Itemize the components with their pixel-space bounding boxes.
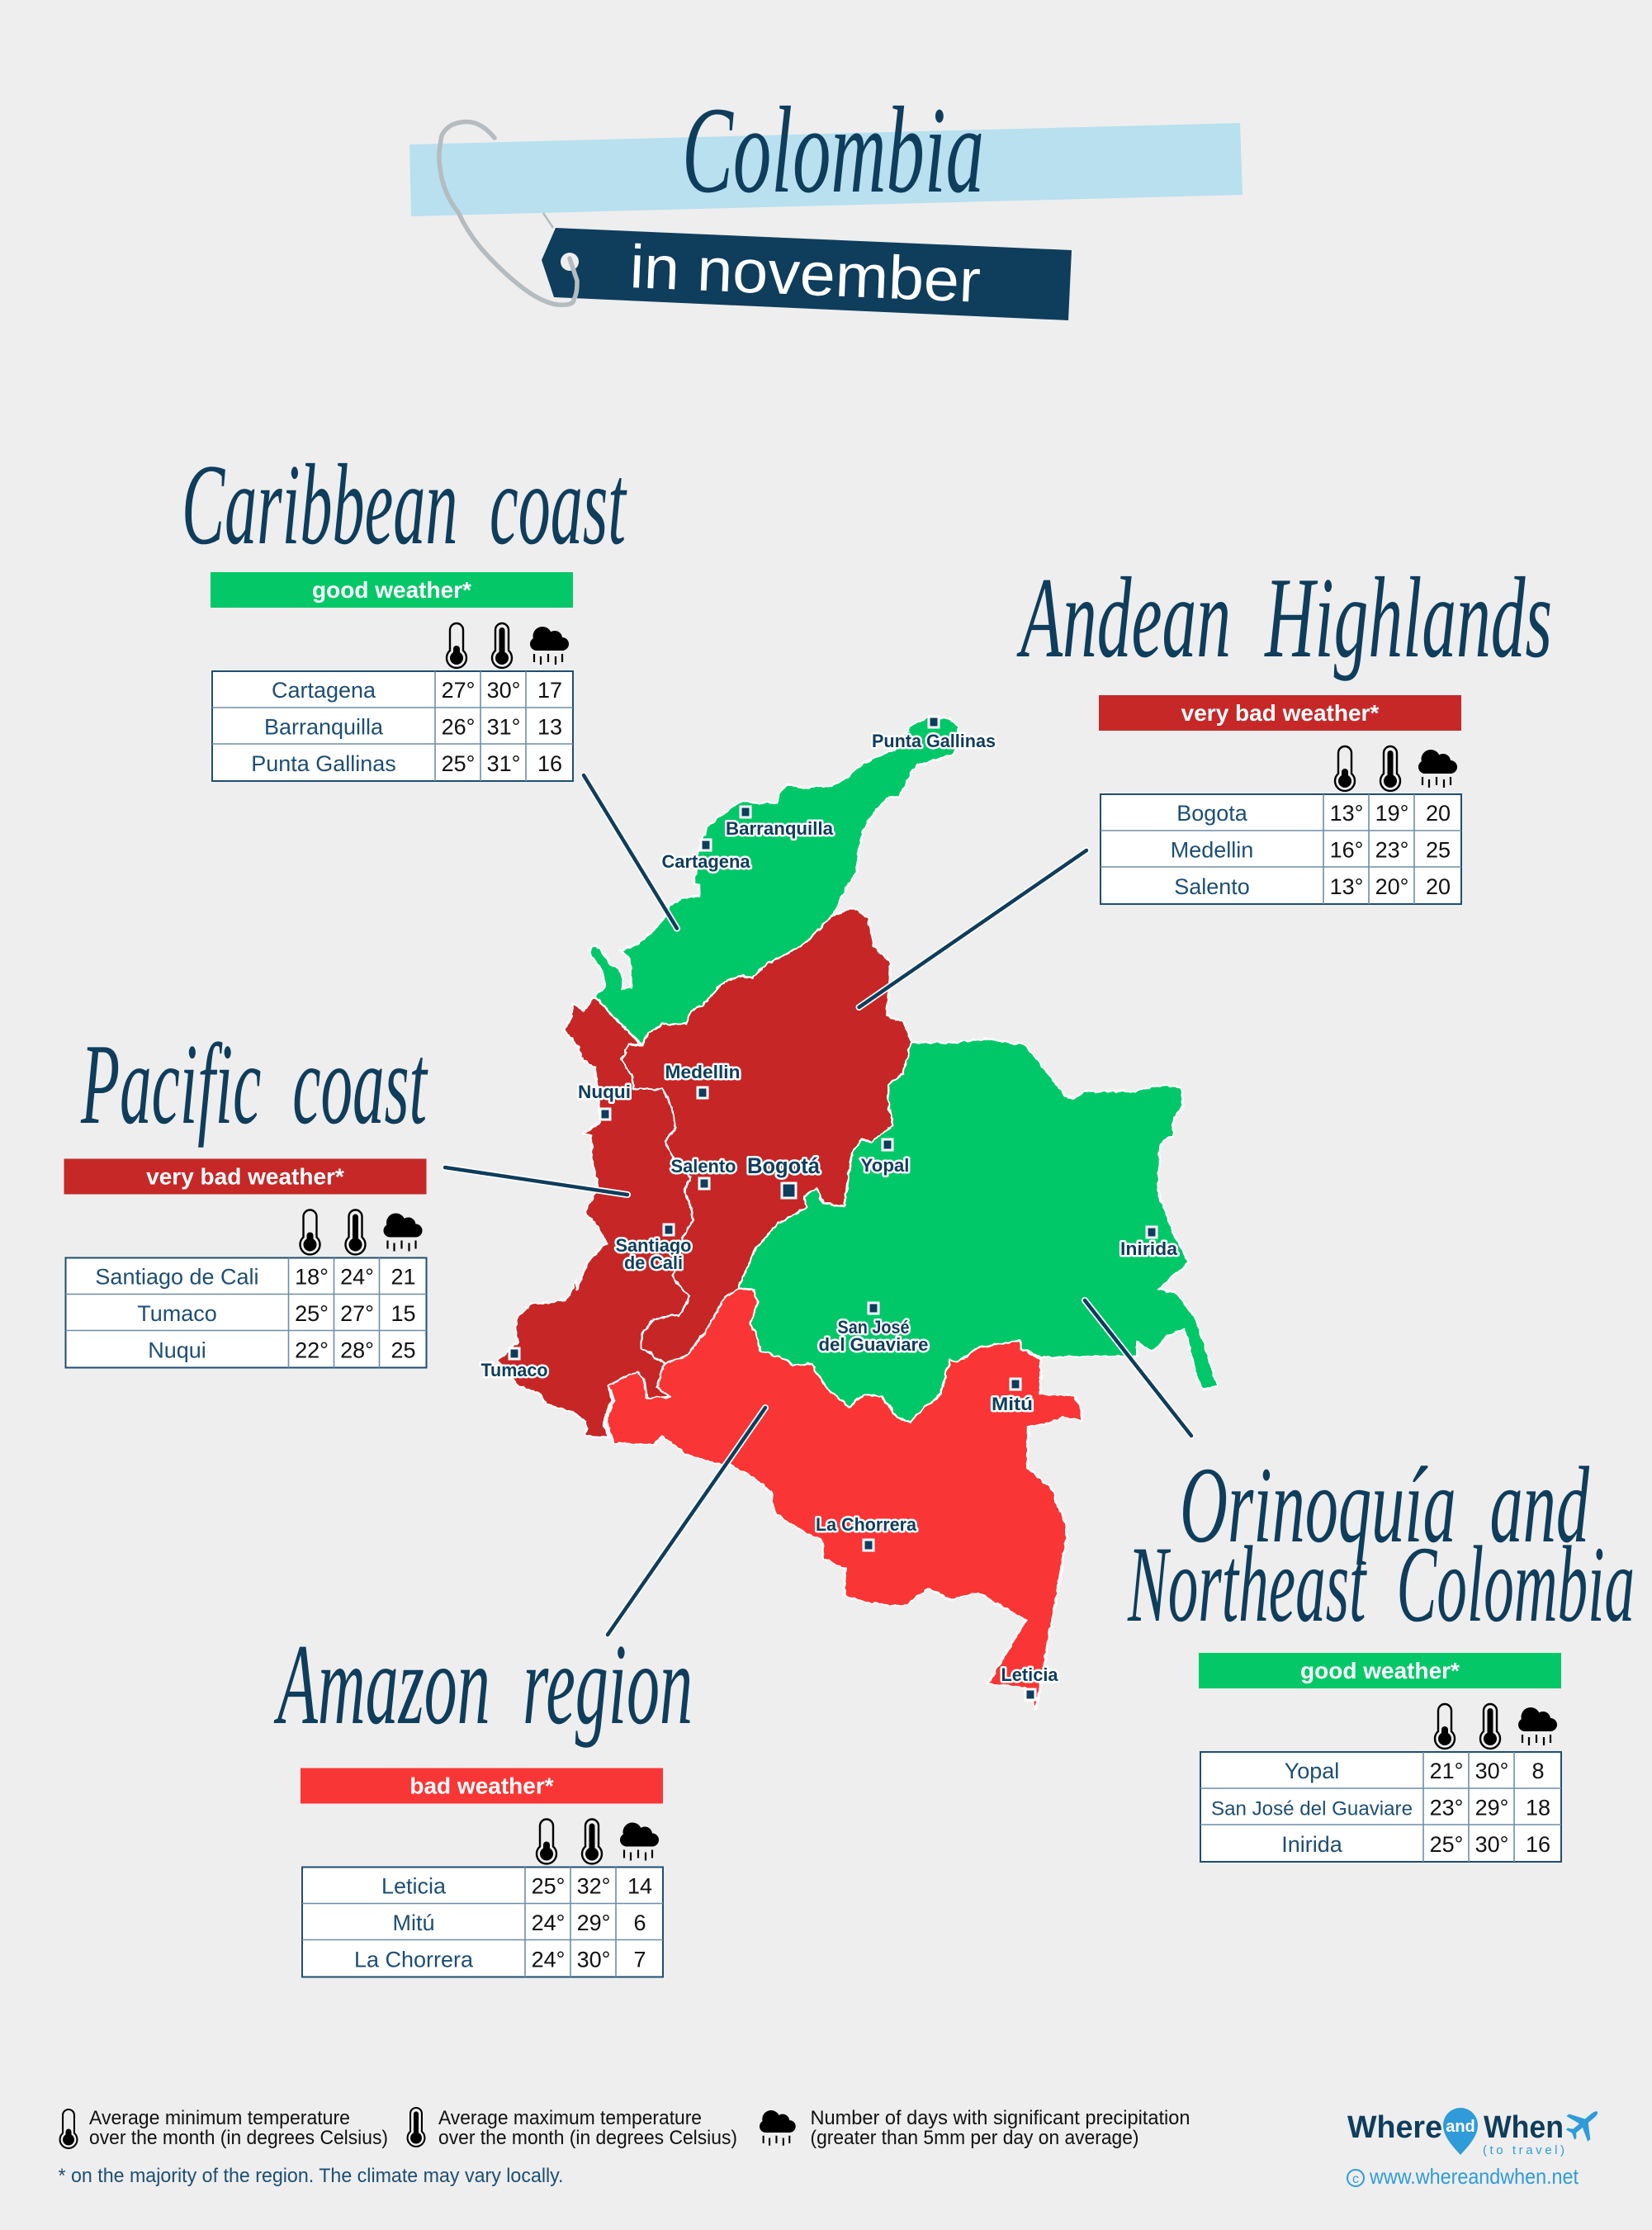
region: Caribbean coast (589, 717, 960, 1045)
city: San José del Guaviare: del Guaviare (819, 1334, 928, 1355)
table: San José del Guaviare (1211, 1798, 1413, 1820)
weather bar: very bad weather* (1181, 700, 1379, 726)
heading: Caribbean coast: Caribbean coast (182, 441, 627, 569)
icons (537, 1820, 659, 1863)
table: 29° (577, 1910, 610, 1935)
weather bar (1199, 1653, 1561, 1688)
legend: maximum temperature (408, 2107, 737, 2149)
table: 25° (532, 1874, 565, 1899)
city: Yopal (860, 1139, 910, 1176)
legend: maximum temperature: Average maximum temperature (438, 2107, 702, 2129)
table (1101, 794, 1461, 904)
tag string (439, 122, 577, 305)
city: Cartagena: Cartagena (662, 851, 750, 872)
table: Salento (1174, 874, 1250, 899)
panel: Orinoquía and Northeast Colombia (1199, 1653, 1561, 1862)
city: Inirida (1120, 1227, 1178, 1259)
weather bar: good weather* (1300, 1658, 1460, 1683)
region: Orinoquía and Northeast (738, 1039, 1218, 1422)
city: Leticia: Leticia (1001, 1664, 1058, 1685)
legend: precipitation: (greater than 5mm per day on average) (811, 2127, 1139, 2149)
city: La Chorrera: La Chorrera (816, 1514, 917, 1535)
table: 25 (1426, 837, 1451, 862)
table: 16 (537, 751, 562, 776)
icons (301, 1210, 423, 1254)
table: 6 (633, 1910, 646, 1935)
table: 30° (487, 678, 520, 703)
capital: Bogotá (747, 1153, 821, 1198)
title band (409, 123, 1243, 216)
arrow: Andean leader line (859, 850, 1086, 1007)
table: Medellin (1171, 837, 1253, 862)
panel: Caribbean coast (211, 572, 573, 781)
icons (1335, 746, 1457, 791)
region: Andean Highlands (621, 908, 911, 1364)
icons (447, 623, 569, 668)
table: 25° (1430, 1832, 1463, 1857)
table: 23° (1375, 837, 1408, 862)
table: Tumaco (137, 1301, 217, 1326)
city: Barranquilla (726, 807, 834, 839)
table: 31° (487, 751, 520, 776)
table: 20 (1426, 801, 1451, 826)
table: 16 (1526, 1832, 1550, 1857)
table: 29° (1475, 1795, 1508, 1820)
table: Bogota (1176, 801, 1248, 826)
table: Cartagena (272, 678, 376, 703)
luggage tag (542, 228, 1072, 320)
logo: Where and When (1347, 2100, 1608, 2189)
heading: Pacific coast: Pacific coast (80, 1020, 428, 1148)
table: Yopal (1285, 1759, 1339, 1783)
city: Santiago de Cali (616, 1224, 692, 1273)
table: 21 (391, 1265, 416, 1290)
arrow: Pacific leader line (445, 1167, 627, 1195)
table: Mitú (392, 1910, 435, 1935)
table: Leticia (381, 1874, 447, 1899)
table: 7 (633, 1947, 646, 1972)
table: 18° (295, 1265, 329, 1290)
city: Medellin (665, 1062, 740, 1098)
table: 27° (340, 1301, 374, 1326)
table: La Chorrera (354, 1947, 474, 1972)
city: Inirida: Inirida (1120, 1238, 1178, 1259)
title: Colombia: Colombia (682, 82, 984, 219)
table: Inirida (1281, 1832, 1343, 1857)
city: Nuqui (578, 1082, 631, 1120)
city: Tumaco (480, 1348, 548, 1380)
table (1200, 1752, 1561, 1862)
weather bar: bad weather* (409, 1773, 554, 1798)
table: 20° (1375, 874, 1408, 899)
panel: Andean Highlands (1099, 695, 1461, 904)
city: Barranquilla: Barranquilla (726, 818, 834, 839)
table: 24° (532, 1947, 565, 1972)
icons (1435, 1704, 1557, 1749)
city: La Chorrera (816, 1514, 917, 1551)
arrow: Amazon leader line (608, 1408, 765, 1635)
region: Amazon (606, 1289, 1082, 1710)
table: 30° (1475, 1759, 1508, 1783)
heading: Orinoquía and Northeast Colombia (1127, 1444, 1635, 1645)
table: 22° (295, 1338, 329, 1362)
map regions (498, 717, 1218, 1710)
map of Colombia (480, 717, 1218, 1710)
logo: Where and When: (to travel) (1483, 2143, 1564, 2157)
table: 13° (1330, 874, 1363, 899)
arrow: Caribbean leader line (584, 775, 677, 928)
table: 31° (487, 715, 520, 740)
city: Salento: Salento (670, 1156, 736, 1177)
weather bar (211, 572, 573, 608)
table: 25° (442, 751, 475, 776)
table: 24° (532, 1910, 565, 1935)
table: 28° (340, 1338, 374, 1362)
logo: Where and When: When (1484, 2110, 1564, 2145)
city: Cartagena (662, 840, 750, 872)
table: 24° (340, 1265, 374, 1290)
city: Tumaco: Tumaco (480, 1360, 548, 1380)
tag string upper segment (543, 213, 553, 228)
legend: precipitation (760, 2107, 1190, 2149)
table: 16° (1330, 837, 1363, 862)
heading: Amazon region: Amazon region (273, 1621, 693, 1749)
table: 30° (577, 1947, 610, 1972)
city: San José del Guaviare: San José (837, 1317, 910, 1338)
logo: Where and When: and (1446, 2118, 1475, 2136)
table (212, 671, 573, 781)
table: 13 (537, 715, 562, 740)
table: 25° (295, 1301, 329, 1326)
subtitle: in november: in november (628, 232, 982, 315)
weather bar: very bad weather* (146, 1164, 344, 1189)
legend: maximum temperature: over the month (in degrees Celsius) (438, 2127, 737, 2149)
arrow: Orinoquía leader line (1085, 1300, 1191, 1436)
table: 20 (1426, 874, 1451, 899)
table: 23° (1430, 1795, 1463, 1820)
city: Salento (670, 1156, 736, 1189)
weather bar (1099, 695, 1461, 731)
city: Mitú (992, 1379, 1033, 1414)
title block (409, 82, 1243, 320)
table: 27° (442, 678, 475, 703)
table: 26° (442, 715, 475, 740)
legend: minimum temperature: over the month (in degrees Celsius) (89, 2127, 388, 2149)
legend: minimum temperature: Average minimum temperature (89, 2107, 350, 2129)
table: 14 (627, 1874, 652, 1899)
table (302, 1868, 663, 1977)
city: Medellin: Medellin (665, 1062, 740, 1082)
table: 18 (1526, 1795, 1550, 1820)
city: Leticia (1001, 1664, 1058, 1700)
table: 32° (577, 1874, 610, 1899)
city: Punta Gallinas: Punta Gallinas (872, 731, 996, 751)
table: 17 (537, 678, 562, 703)
footnote: * on the majority of the region. The climate may vary locally. (58, 2165, 563, 2187)
region: Pacific coast (498, 997, 693, 1437)
legend: precipitation: Number of days with significant precipitation (811, 2107, 1190, 2129)
table: Santiago de Cali (95, 1265, 259, 1290)
city: Yopal: Yopal (860, 1155, 910, 1176)
copyright and website: c (1352, 2172, 1359, 2186)
panel: Amazon region (301, 1768, 663, 1977)
table: Punta Gallinas (251, 751, 396, 776)
weather bar: good weather* (312, 577, 471, 603)
table: Nuqui (148, 1338, 206, 1362)
icon: map pin (1443, 2108, 1478, 2155)
table: 8 (1531, 1759, 1545, 1783)
weather bar (64, 1159, 426, 1194)
city: Nuqui: Nuqui (578, 1082, 631, 1102)
legend (60, 2107, 1190, 2149)
city: Santiago de Cali: de Cali (624, 1252, 683, 1273)
table: 25 (391, 1338, 416, 1362)
logo: Where and When: Where (1347, 2110, 1442, 2145)
city: Santiago de Cali: Santiago (616, 1235, 692, 1256)
city: San José del Guaviare (819, 1303, 928, 1355)
table: 30° (1475, 1832, 1508, 1857)
panel: Pacific coast (64, 1159, 426, 1367)
capital: Bogotá: Bogotá (747, 1153, 821, 1178)
city: Punta Gallinas (872, 717, 996, 751)
legend: minimum temperature (60, 2107, 388, 2149)
table: 19° (1375, 801, 1408, 826)
copyright and website: www.whereandwhen.net (1369, 2164, 1579, 2189)
table: 21° (1430, 1759, 1463, 1783)
table (66, 1258, 426, 1367)
table: 15 (391, 1301, 416, 1326)
table: 13° (1330, 801, 1363, 826)
icon: plane (1560, 2100, 1608, 2147)
city: Mitú: Mitú (992, 1394, 1033, 1414)
weather bar (301, 1768, 663, 1803)
tag hole (561, 253, 579, 271)
table: Barranquilla (264, 715, 384, 740)
